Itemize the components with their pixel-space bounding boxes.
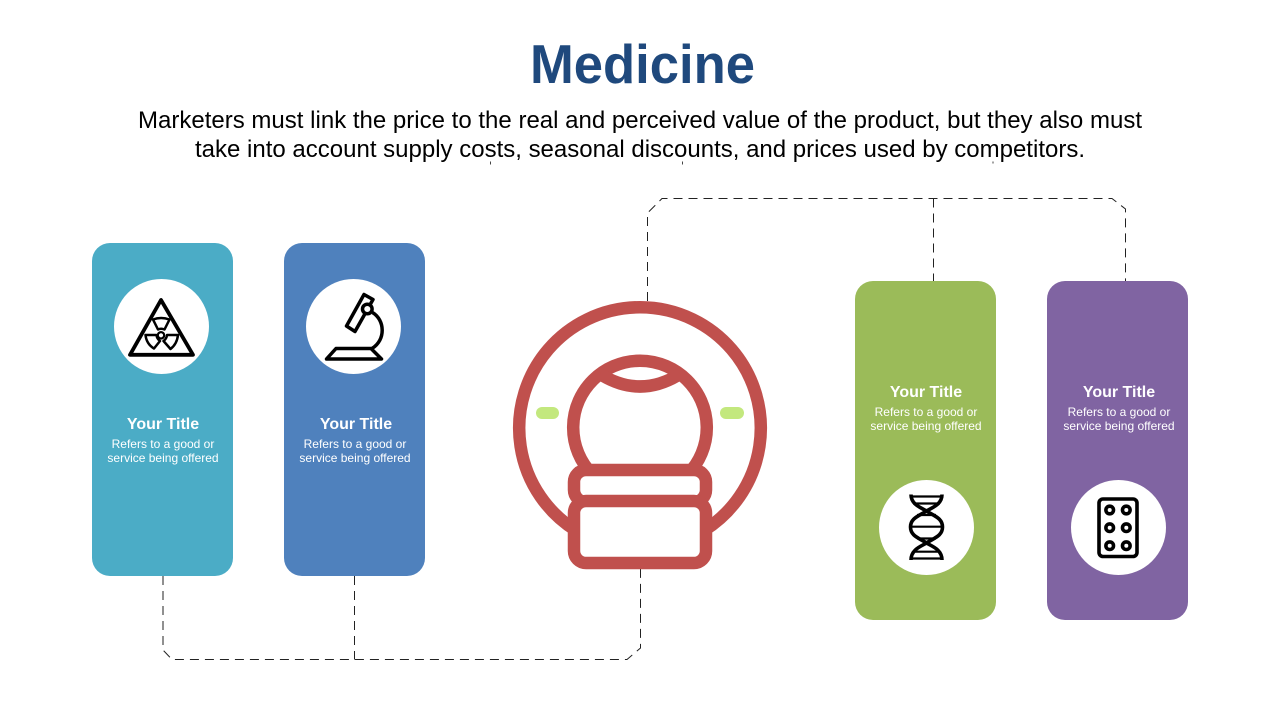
- card: blue microscope: [284, 243, 425, 576]
- connector: top dashed lines to right cards: [648, 198, 1126, 301]
- card: green DNA: [855, 281, 996, 620]
- icon: microscope: [326, 294, 382, 359]
- card text: Your Title: [320, 416, 392, 433]
- scanner lower table: [574, 501, 706, 563]
- connector: bottom dashed lines to left cards: [163, 569, 640, 660]
- card text: service being offered: [1063, 419, 1175, 433]
- scanner outer ring: [519, 307, 761, 530]
- card text: Refers to a good or: [875, 405, 977, 419]
- subtitle text block: take into account supply costs, seasonal discounts, and prices used by competitors.: [195, 136, 1085, 163]
- card text: [107, 416, 219, 465]
- card text: service being offered: [299, 451, 411, 465]
- card: teal radiation: [92, 243, 233, 576]
- card text: [1063, 384, 1175, 433]
- icon: radiation warning: [130, 300, 193, 355]
- card text: service being offered: [870, 419, 982, 433]
- card text: service being offered: [107, 451, 219, 465]
- card text: [870, 384, 982, 433]
- card text: Refers to a good or: [1068, 405, 1170, 419]
- subtitle text block: Marketers must link the price to the real and perceived value of the product, but they also must: [138, 107, 1142, 134]
- scanner upper table: [574, 470, 706, 502]
- card text: Refers to a good or: [304, 437, 406, 451]
- icon: blister pack: [1099, 499, 1137, 556]
- card text: Your Title: [1083, 384, 1155, 401]
- title: Medicine: [530, 33, 755, 95]
- card text: Your Title: [890, 384, 962, 401]
- indicator lights: [536, 407, 559, 419]
- card: purple pills: [1047, 281, 1188, 620]
- icon: DNA helix: [910, 494, 943, 560]
- scanner inner bore: [573, 361, 707, 474]
- card text: Refers to a good or: [112, 437, 214, 451]
- card text: [299, 416, 411, 465]
- scanner lens: [600, 374, 680, 386]
- central icon: CT scanner: [519, 307, 761, 563]
- subtitle text block: [138, 107, 1142, 163]
- card text: Your Title: [127, 416, 199, 433]
